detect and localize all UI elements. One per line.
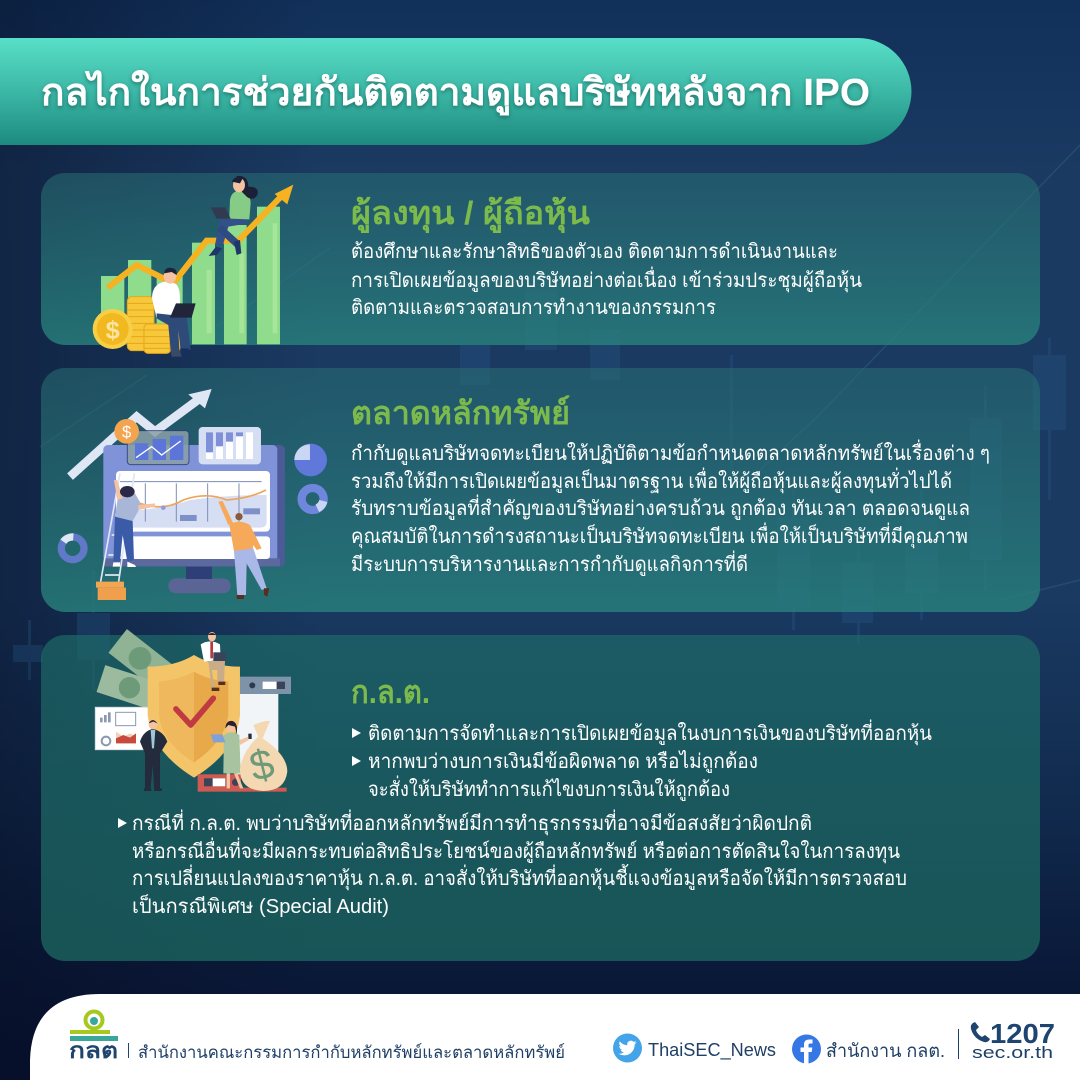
- icon: facebook: [792, 1034, 821, 1064]
- text block: investors: [351, 241, 862, 319]
- bullet list: SEC duties: หากพบว่างบการเงินมีข้อผิดพลาด หรือไม่ถูกต้อง: [368, 750, 758, 774]
- bullet: special audit: กรณีที่ ก.ล.ต. พบว่าบริษัทที่ออกหลักทรัพย์มีการทำธุรกรรมที่อาจมีข้อสงสัยว่าผิดปกติ: [132, 809, 812, 836]
- illustration: shield with team: $: [245, 739, 279, 790]
- footer: [30, 994, 1080, 1080]
- website: sec.or.th: [972, 1043, 1053, 1062]
- facebook page: สำนักงาน กลต.: [826, 1040, 945, 1061]
- icon: phone: [971, 1022, 990, 1042]
- logo: กลต: [69, 1038, 118, 1063]
- title: กลไกในการช่วยกันติดตามดูแลบริษัทหลังจาก IPO: [41, 70, 870, 116]
- bullet list: SEC duties: จะสั่งให้บริษัททำการแก้ไขงบการเงินให้ถูกต้อง: [368, 775, 730, 802]
- text block: stock exchange: รับทราบข้อมูลที่สำคัญของบริษัทอย่างครบถ้วน ถูกต้อง ทันเวลา ตลอดจนดูแล: [351, 494, 970, 521]
- illustration: monitor with analysts: $: [122, 423, 131, 442]
- text block: stock exchange: รวมถึงให้มีการเปิดเผยข้อมูลเป็นมาตรฐาน เพื่อให้ผู้ถือหุ้นและผู้ลงทุนทั่วไปได้: [351, 467, 952, 494]
- illustration: shield with team: [95, 629, 291, 792]
- hotline: 1207: [990, 1018, 1055, 1049]
- bullet list: SEC duties: [352, 719, 932, 802]
- bullet list: SEC duties: ติดตามการจัดทำและการเปิดเผยข้อมูลในงบการเงินของบริษัทที่ออกหุ้น: [368, 719, 932, 746]
- text block: investors: การเปิดเผยข้อมูลของบริษัทอย่างต่อเนื่อง เข้าร่วมประชุมผู้ถือหุ้น: [351, 266, 862, 293]
- text block: stock exchange: [351, 439, 990, 577]
- bullet: special audit: การเปลี่ยนแปลงของราคาหุ้น ก.ล.ต. อาจสั่งให้บริษัทที่ออกหุ้นชี้แจงข้อมูลหรือจัดให้มีการตรวจสอบ: [132, 864, 907, 891]
- illustration: monitor with analysts: [61, 389, 327, 600]
- bullet: special audit: [118, 809, 907, 918]
- bullet: special audit: หรือกรณีอื่นที่จะมีผลกระทบต่อสิทธิประโยชน์ของผู้ถือหลักทรัพย์ หรือต่อการตัดสินใจในการลงทุน: [132, 837, 900, 864]
- text block: investors: ต้องศึกษาและรักษาสิทธิของตัวเอง ติดตามการดำเนินงานและ: [351, 241, 838, 263]
- heading: stock exchange: ตลาดหลักทรัพย์: [351, 395, 570, 431]
- heading: SEC: ก.ล.ต.: [351, 674, 430, 710]
- text block: stock exchange: มีระบบการบริหารงานและการกำกับดูแลกิจการที่ดี: [351, 550, 748, 577]
- panel: investors: [41, 173, 1040, 357]
- text block: investors: ติดตามและตรวจสอบการทำงานของกรรมการ: [351, 297, 716, 319]
- logo: [69, 1012, 118, 1063]
- text block: stock exchange: กำกับดูแลบริษัทจดทะเบียนให้ปฏิบัติตามข้อกำหนดตลาดหลักทรัพย์ในเรื่องต่าง ๆ: [351, 439, 990, 466]
- illustration: investors on rising bar chart: $: [106, 316, 120, 344]
- organisation name: สำนักงานคณะกรรมการกำกับหลักทรัพย์และตลาดหลักทรัพย์: [138, 1043, 565, 1062]
- text block: stock exchange: คุณสมบัติในการดำรงสถานะเป็นบริษัทจดทะเบียน เพื่อให้เป็นบริษัทที่มีคุณภาพ: [351, 522, 968, 549]
- heading: investors: ผู้ลงทุน / ผู้ถือหุ้น: [351, 195, 590, 234]
- panel: SEC: [41, 629, 1040, 961]
- panel: stock exchange: [41, 368, 1040, 612]
- header banner: [0, 38, 911, 145]
- twitter handle: ThaiSEC_News: [648, 1039, 776, 1061]
- bullet: special audit: เป็นกรณีพิเศษ (Special Audit): [132, 893, 389, 918]
- illustration: investors on rising bar chart: [93, 176, 293, 357]
- icon: twitter: [613, 1034, 642, 1062]
